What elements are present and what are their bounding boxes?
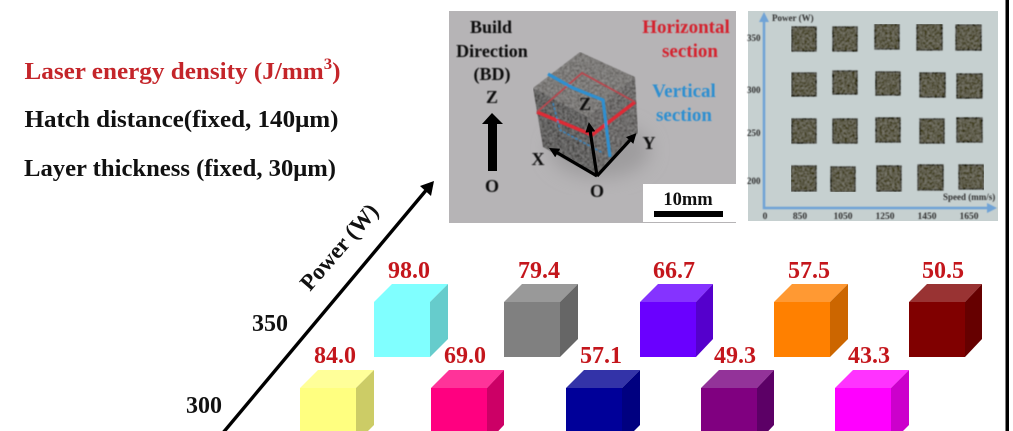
- cube 49.3: 49.3: [714, 343, 756, 369]
- label: horizontal section: [642, 17, 730, 62]
- cube 43.3: [835, 343, 909, 431]
- axis labels: Speed (mm/s): [943, 192, 995, 202]
- axis labels: 1450: [918, 212, 937, 222]
- photo labels: (BD): [474, 64, 510, 85]
- label: vertical section: Vertical: [652, 81, 716, 102]
- photo labels: O: [485, 176, 499, 196]
- cube 69.0: 69.0: [444, 343, 486, 369]
- cube 79.4: 79.4: [518, 258, 560, 284]
- cube 43.3: 43.3: [848, 343, 890, 369]
- label: vertical section: [652, 81, 716, 126]
- label: horizontal section: section: [662, 41, 718, 62]
- label: horizontal section: Horizontal: [642, 17, 730, 38]
- coordinate arrows: [556, 130, 631, 176]
- panel: build direction photo: [449, 11, 736, 223]
- cube 84.0: [300, 343, 374, 431]
- cube 50.5: 50.5: [922, 258, 964, 284]
- photo labels: X: [532, 149, 544, 169]
- text: laser energy density: ): [332, 59, 340, 85]
- axis labels: 350: [747, 33, 761, 43]
- tick label 350: 350: [252, 311, 288, 337]
- cube 84.0: 84.0: [314, 343, 356, 369]
- axis labels: Power (W): [772, 13, 814, 23]
- axes: [759, 12, 997, 213]
- cube 66.7: [640, 258, 713, 357]
- cube 49.3: [701, 343, 774, 431]
- cube 66.7: 66.7: [653, 258, 695, 284]
- cube 57.1: 57.1: [580, 343, 622, 369]
- axis labels: 250: [747, 128, 761, 138]
- photo labels: Z: [579, 94, 591, 114]
- panel: samples photo: [747, 11, 998, 222]
- photo labels: Z: [486, 87, 498, 107]
- section lines: [537, 73, 635, 157]
- cube 69.0: [431, 343, 504, 431]
- axis labels: [747, 13, 995, 222]
- label: vertical section: section: [656, 105, 712, 126]
- cube 57.5: 57.5: [788, 258, 830, 284]
- sample grid: [791, 24, 984, 192]
- photo background: [748, 11, 998, 221]
- cube 57.5: [774, 258, 848, 357]
- photo labels: O: [590, 181, 604, 201]
- scale bar: [643, 184, 736, 222]
- build direction arrow: [482, 113, 503, 171]
- cube shadow: [550, 122, 650, 178]
- cube 98.0: 98.0: [388, 258, 430, 284]
- tick label 300: 300: [186, 393, 222, 419]
- text: layer thickness: Layer thickness (fixed, 30μm): [24, 156, 336, 182]
- axis labels: 850: [793, 212, 807, 222]
- axis title: power: Power (W): [295, 199, 383, 295]
- cube 57.1: [566, 343, 640, 431]
- text: laser energy density: Laser energy density (J/mm: [24, 59, 310, 85]
- axis labels: 1050: [834, 212, 853, 222]
- cube 98.0: [374, 258, 448, 357]
- metal cube photo: [533, 52, 638, 177]
- text: laser energy density: 3: [324, 56, 332, 73]
- photo labels: Y: [642, 133, 656, 153]
- axis labels: 1650: [960, 212, 979, 222]
- axis labels: 200: [747, 176, 761, 186]
- photo background: [449, 11, 736, 223]
- text: hatch distance: Hatch distance(fixed, 140μm): [24, 107, 338, 133]
- power axis arrow: [222, 181, 434, 431]
- axis labels: 0: [763, 212, 768, 222]
- photo labels: Direction: [456, 41, 528, 61]
- axis labels: 1250: [876, 212, 895, 222]
- cube 50.5: [909, 258, 982, 357]
- cube 79.4: [504, 258, 578, 357]
- scale bar: 10mm: [663, 190, 713, 210]
- right border bar: [1006, 0, 1009, 431]
- photo labels: [456, 17, 656, 201]
- axis labels: 300: [747, 85, 761, 95]
- photo labels: Build: [470, 17, 512, 37]
